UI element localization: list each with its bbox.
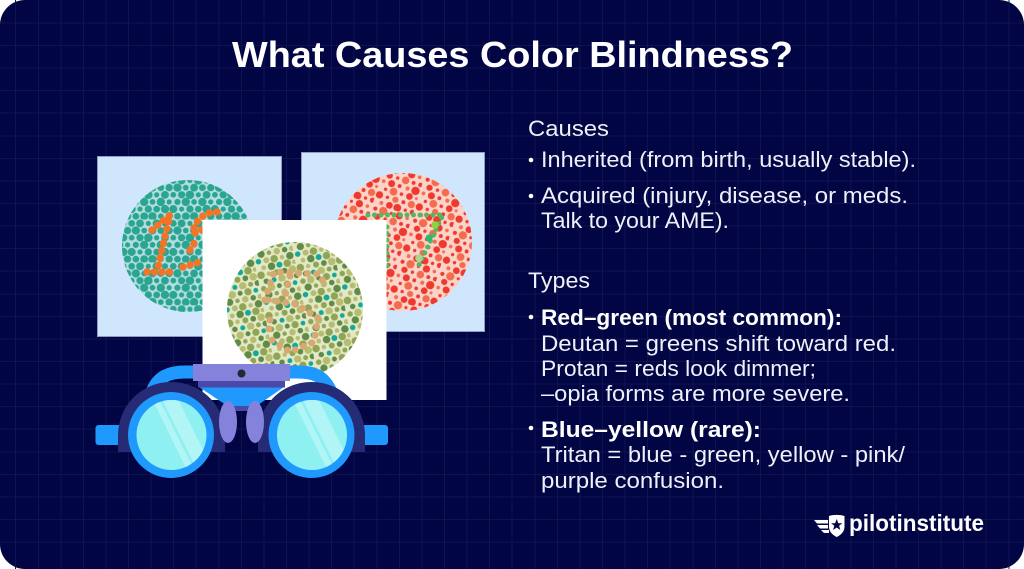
text block: blue-yellow — [529, 417, 906, 493]
panel: white olive plate — [202, 220, 386, 400]
arches and centre bridge — [152, 372, 331, 392]
heading: causes: Causes — [528, 116, 609, 141]
text block: red-green: Deutan = greens shift toward red. — [541, 331, 896, 356]
left eyepiece — [128, 392, 218, 480]
text block: red-green: Protan = reds look dimmer; — [541, 356, 816, 381]
left nose pad — [219, 401, 237, 443]
heading: types: Types — [528, 268, 590, 293]
text block: causes list — [529, 147, 916, 233]
right eyepiece — [268, 392, 358, 480]
text block: causes list: Inherited (from birth, usually stable). — [541, 147, 916, 172]
text block: red-green: –opia forms are more severe. — [541, 381, 850, 406]
left dark housing — [118, 382, 225, 452]
text block: blue-yellow: purple confusion. — [541, 468, 724, 493]
logo: pilot institute: pilotinstitute — [849, 510, 984, 536]
right dark housing — [258, 382, 365, 452]
text block: causes list: Acquired (injury, disease, or meds. — [541, 183, 908, 208]
text block: blue-yellow: Blue–yellow (rare): — [541, 417, 761, 442]
icon: trial frame binoculars — [96, 364, 388, 480]
bridge underside — [199, 387, 284, 411]
panel: teal plate showing number 12 — [98, 156, 282, 336]
text block: red-green — [529, 305, 896, 406]
side tab right — [358, 425, 388, 445]
right nose pad — [246, 401, 264, 443]
side tab left — [96, 425, 126, 445]
title: What Causes Color Blindness? — [232, 34, 793, 75]
panel: red plate with green number — [302, 152, 484, 332]
text block: blue-yellow: Tritan = blue - green, yellow - pink/ — [541, 442, 906, 467]
adjuster dot — [238, 370, 246, 378]
text block: red-green: Red–green (most common): — [541, 305, 842, 330]
top purple bar — [198, 380, 285, 388]
top plate — [193, 364, 290, 381]
text block: causes list: Talk to your AME). — [541, 208, 729, 233]
bridge shadow — [226, 406, 258, 411]
